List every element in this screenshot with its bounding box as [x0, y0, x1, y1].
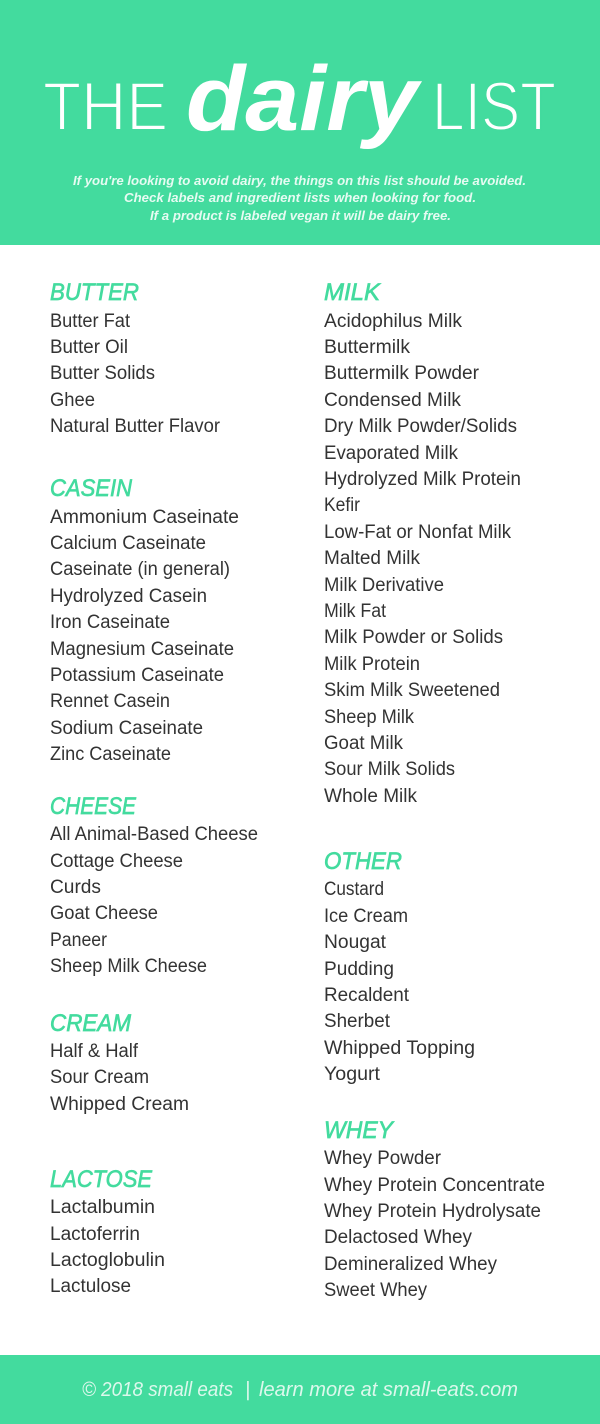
panel: whey: Whey Protein Hydrolysate: [324, 1201, 541, 1222]
panel: other: [324, 848, 475, 1085]
panel: milk: Evaporated Milk: [324, 443, 458, 464]
panel: casein: Magnesium Caseinate: [50, 639, 234, 660]
panel: other: Pudding: [324, 959, 394, 980]
panel: milk: Milk Powder or Solids: [324, 627, 503, 648]
panel: butter: Natural Butter Flavor: [50, 416, 221, 437]
panel: milk: Sour Milk Solids: [324, 759, 455, 780]
panel: casein: Caseinate (in general): [50, 559, 230, 580]
panel: cheese: Paneer: [50, 930, 108, 951]
panel: cheese: [50, 793, 258, 977]
panel: cheese: Goat Cheese: [50, 903, 158, 924]
panel: milk: Condensed Milk: [324, 390, 461, 411]
panel: whey: Sweet Whey: [324, 1280, 427, 1301]
panel: cheese: Cottage Cheese: [50, 851, 183, 872]
panel: other: Nougat: [324, 932, 387, 953]
footer text: learn more at small-eats.com: [259, 1379, 518, 1401]
intro text: If you're looking to avoid dairy, the things on this list should be avoided.: [73, 173, 526, 188]
panel: milk: Low-Fat or Nonfat Milk: [324, 522, 511, 543]
panel: cream: Whipped Cream: [50, 1094, 189, 1115]
panel: casein: Ammonium Caseinate: [50, 507, 239, 528]
panel: butter: [50, 279, 221, 437]
panel: cheese: CHEESE: [50, 793, 137, 820]
footer text: © 2018 small eats: [82, 1379, 233, 1401]
panel: lactose: Lactulose: [50, 1276, 131, 1297]
panel: whey: WHEY: [324, 1117, 395, 1144]
panel: whey: Delactosed Whey: [324, 1227, 472, 1248]
panel: casein: CASEIN: [50, 475, 133, 502]
panel: cheese: All Animal-Based Cheese: [50, 824, 258, 845]
panel: whey: [324, 1117, 545, 1301]
panel: casein: Hydrolyzed Casein: [50, 586, 207, 607]
panel: casein: [50, 475, 239, 765]
panel: cream: Sour Cream: [50, 1067, 149, 1088]
panel: whey: Whey Powder: [324, 1148, 442, 1169]
panel: other: OTHER: [324, 848, 402, 875]
panel: header: [0, 0, 600, 245]
panel: other: Sherbet: [324, 1011, 391, 1032]
panel: cream: Half & Half: [50, 1041, 139, 1062]
panel: casein: Iron Caseinate: [50, 612, 170, 633]
panel: lactose: Lactoglobulin: [50, 1250, 165, 1271]
panel: milk: Buttermilk: [324, 337, 411, 358]
panel: casein: Rennet Casein: [50, 691, 170, 712]
panel: whey: Whey Protein Concentrate: [324, 1175, 545, 1196]
panel: lactose: [50, 1166, 165, 1297]
intro text: Check labels and ingredient lists when looking for food.: [124, 190, 476, 205]
title: [43, 48, 556, 150]
intro text: If a product is labeled vegan it will be dairy free.: [150, 208, 451, 223]
panel: butter: Ghee: [50, 390, 95, 411]
panel: butter: BUTTER: [50, 279, 139, 306]
panel: footer: [0, 1355, 600, 1424]
panel: other: Ice Cream: [324, 906, 408, 927]
panel: milk: Malted Milk: [324, 548, 420, 569]
panel: milk: Hydrolyzed Milk Protein: [324, 469, 521, 490]
panel: milk: Kefir: [324, 495, 361, 516]
panel: milk: Dry Milk Powder/Solids: [324, 416, 517, 437]
panel: whey: Demineralized Whey: [324, 1254, 497, 1275]
panel: cheese: Curds: [50, 877, 101, 898]
panel: casein: Calcium Caseinate: [50, 533, 206, 554]
footer text: |: [245, 1379, 250, 1401]
panel: milk: Whole Milk: [324, 786, 417, 807]
title: dairy: [186, 48, 422, 150]
title: THE: [43, 68, 168, 145]
panel: other: Custard: [324, 879, 384, 900]
panel: milk: Buttermilk Powder: [324, 363, 480, 384]
panel: casein: Potassium Caseinate: [50, 665, 224, 686]
panel: milk: Acidophilus Milk: [324, 311, 462, 332]
panel: milk: [324, 279, 521, 807]
panel: milk: Skim Milk Sweetened: [324, 680, 500, 701]
panel: cream: [50, 1010, 189, 1115]
panel: lactose: LACTOSE: [50, 1166, 153, 1193]
panel: lactose: Lactalbumin: [50, 1197, 155, 1218]
panel: butter: Butter Oil: [50, 337, 128, 358]
panel: milk: Milk Derivative: [324, 575, 444, 596]
intro text: [73, 173, 526, 223]
panel: butter: Butter Fat: [50, 311, 131, 332]
panel: other: Recaldent: [324, 985, 410, 1006]
panel: milk: MILK: [324, 279, 381, 306]
panel: butter: Butter Solids: [50, 363, 155, 384]
panel: other: Yogurt: [324, 1064, 381, 1085]
panel: cheese: Sheep Milk Cheese: [50, 956, 207, 977]
panel: casein: Sodium Caseinate: [50, 718, 203, 739]
panel: cream: CREAM: [50, 1010, 131, 1037]
panel: milk: Sheep Milk: [324, 707, 414, 728]
panel: milk: Milk Protein: [324, 654, 420, 675]
title: LIST: [432, 68, 556, 145]
panel: milk: Goat Milk: [324, 733, 403, 754]
panel: other: Whipped Topping: [324, 1038, 475, 1059]
panel: milk: Milk Fat: [324, 601, 387, 622]
footer text: [82, 1379, 518, 1401]
panel: casein: Zinc Caseinate: [50, 744, 171, 765]
panel: lactose: Lactoferrin: [50, 1224, 140, 1245]
